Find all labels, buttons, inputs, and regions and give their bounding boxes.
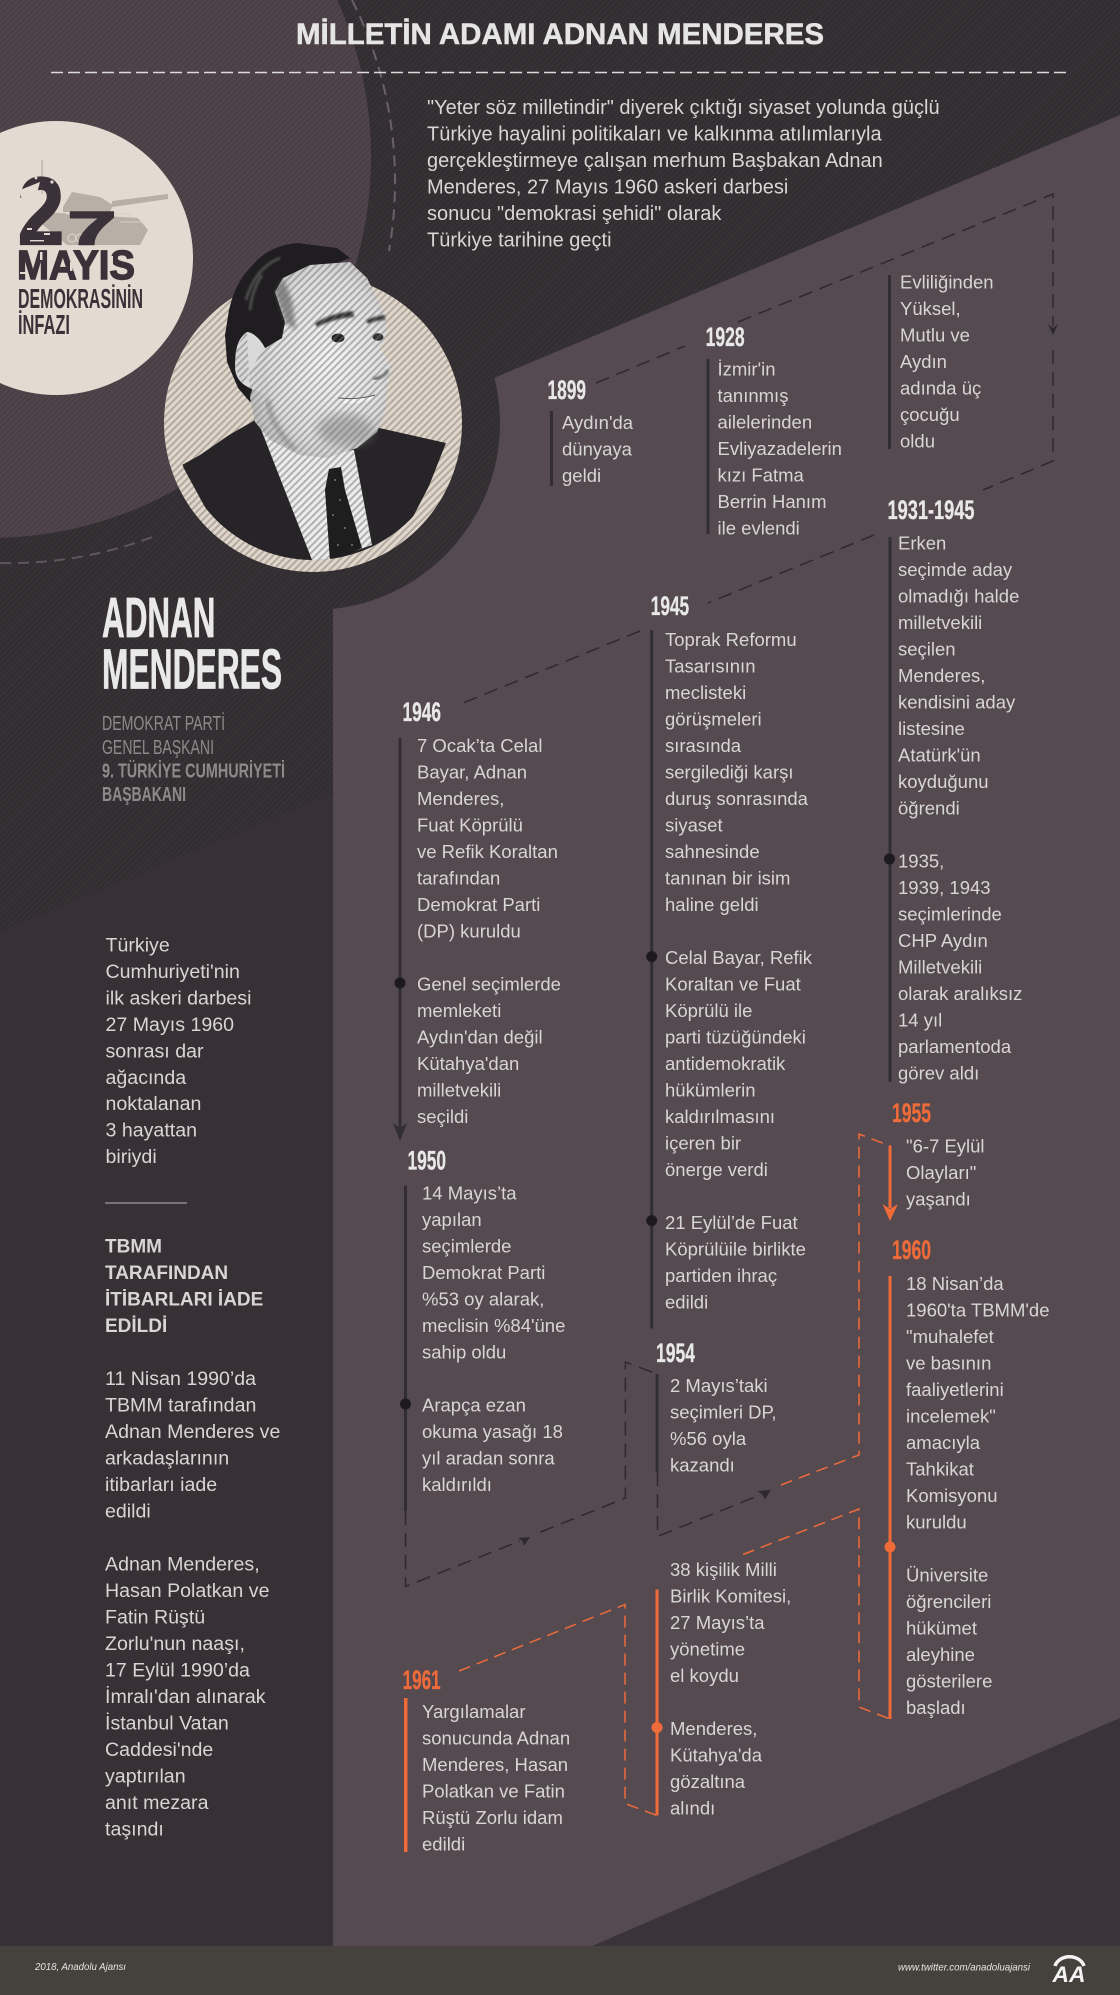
event: 1950: 14 Mayıs’ta	[422, 1182, 517, 1204]
event: 1946: ve Refik Koraltan	[417, 841, 558, 862]
event: 1960: amacıyla	[906, 1432, 981, 1453]
left text: rehabilitation: TBMM tarafından	[105, 1394, 256, 1416]
party role text: 9. TÜRKİYE CUMHURİYETİ	[102, 760, 285, 782]
event: 1928: İzmir'in	[718, 359, 776, 380]
event: 1960: ve basının	[906, 1352, 991, 1374]
arrow: down on right connector	[1048, 324, 1058, 335]
event: 1928	[706, 322, 842, 539]
event: 27 May committee	[652, 1559, 791, 1818]
event: 1961: edildi	[422, 1834, 465, 1854]
event: 1945: Köprülüile birlikte	[665, 1238, 806, 1260]
portrait: hair	[225, 243, 350, 402]
event: 1946: memleketi	[417, 1000, 501, 1021]
left text: monument: Caddesi'nde	[105, 1739, 213, 1761]
title divider	[51, 72, 1069, 74]
event: 1960	[884, 1235, 1050, 1719]
event: 1961: 1961	[403, 1665, 441, 1695]
event: 1928: 1928	[706, 322, 745, 352]
event: 1945: hükümlerin	[665, 1080, 756, 1100]
event: children: çocuğu	[900, 404, 960, 425]
event: 1945: içeren bir	[665, 1132, 741, 1154]
event: 1945: 21 Eylül’de Fuat	[665, 1212, 798, 1233]
event: 1960: 1960	[892, 1235, 931, 1265]
event: 1899: Aydın'da	[562, 412, 634, 433]
left text: coup summary: Cumhuriyeti'nin	[106, 961, 240, 983]
event: 1954: %56 oyla	[670, 1428, 747, 1449]
left text: coup summary: biriydi	[106, 1146, 157, 1168]
event: 1945: parti tüzüğündeki	[665, 1026, 806, 1048]
left text: monument: Zorlu'nun naaşı,	[105, 1633, 245, 1655]
event: 1945	[646, 591, 813, 1328]
portrait: halftone stripes	[235, 262, 392, 458]
event: 1945: duruş sonrasında	[665, 788, 809, 809]
event: 1961: Rüştü Zorlu idam	[422, 1807, 563, 1828]
event: 1931-1945: seçimde aday	[898, 559, 1013, 580]
event: 1950	[400, 1146, 565, 1511]
event: 1946: Genel seçimlerde	[417, 974, 561, 994]
badge word: MAYIS	[17, 242, 135, 288]
footer bar	[0, 1946, 1120, 1995]
party role text: DEMOKRAT PARTİ	[102, 712, 225, 735]
event: 1955	[882, 1098, 985, 1221]
title: MİLLETİN ADAMI ADNAN MENDERES	[296, 18, 824, 51]
left text: monument: taşındı	[105, 1818, 164, 1840]
portrait	[164, 243, 462, 590]
left text: monument: 17 Eylül 1990’da	[105, 1660, 250, 1682]
intro text: gerçekleştirmeye çalışan merhum Başbakan Adnan	[427, 150, 883, 172]
event: 1928: ailelerinden	[718, 412, 812, 433]
party role text	[102, 712, 285, 806]
event: 1945: Toprak Reformu	[665, 629, 797, 650]
event: 1946: (DP) kuruldu	[417, 920, 521, 942]
event: 1945: Köprülü ile	[665, 1000, 752, 1021]
event: 1945: partiden ihraç	[665, 1265, 777, 1286]
event: 1950: sahip oldu	[422, 1342, 506, 1362]
event: 1950: 1950	[408, 1146, 446, 1176]
intro text: sonucu "demokrasi şehidi" olarak	[427, 203, 722, 225]
event: 1945: kaldırılmasını	[665, 1106, 775, 1127]
event: 27 May committee: 38 kişilik Milli	[670, 1559, 777, 1580]
event: 1955: yaşandı	[906, 1188, 971, 1210]
background: dark disc behind portrait	[126, 236, 500, 610]
badge number	[18, 158, 116, 264]
event: 1946: seçildi	[417, 1106, 468, 1127]
event: 1954: 1954	[656, 1338, 695, 1368]
icon: AA logo: AA	[1051, 1962, 1086, 1987]
left text: monument: yaptırılan	[105, 1766, 186, 1788]
arrow: 1954 connector	[758, 1490, 771, 1500]
event: 1931-1945: öğrendi	[898, 798, 960, 819]
event: 1960: faaliyetlerini	[906, 1379, 1004, 1400]
footer url: www.twitter.com/anadoluajansi	[898, 1962, 1031, 1974]
event: 1945: antidemokratik	[665, 1053, 786, 1074]
event: 1928: ile evlendi	[718, 518, 800, 539]
intro text: "Yeter söz milletindir" diyerek çıktığı siyaset yolunda güçlü	[427, 97, 940, 119]
event: 1928: tanınmış	[718, 385, 788, 406]
event: 1946: Kütahya'dan	[417, 1053, 519, 1074]
event: 1928: Evliyazadelerin	[718, 438, 842, 459]
event: 1931-1945: parlamentoda	[898, 1036, 1012, 1057]
event: 1961: Yargılamalar	[422, 1701, 526, 1722]
event: 1945: haline geldi	[665, 894, 759, 915]
event: 1960: 1960'ta TBMM'de	[906, 1300, 1050, 1320]
event: children: Yüksel,	[900, 298, 961, 319]
name heading: MENDERES	[102, 638, 282, 702]
event: 1945: meclisteki	[665, 682, 746, 703]
intro text: Türkiye tarihine geçti	[427, 230, 612, 252]
arrow: 1950 connector	[518, 1537, 530, 1546]
event: 1928: kızı Fatma	[718, 465, 805, 486]
party role text: GENEL BAŞKANI	[102, 737, 214, 759]
event: children	[888, 272, 994, 452]
left text: monument: İstanbul Vatan	[105, 1712, 229, 1734]
left text: monument: Adnan Menderes,	[105, 1554, 260, 1576]
event: 27 May committee: alındı	[670, 1798, 715, 1818]
event: 1931-1945: 14 yıl	[898, 1010, 942, 1031]
left text: monument: İmralı'dan alınarak	[105, 1685, 266, 1708]
event: 1931-1945: görev aldı	[898, 1063, 979, 1084]
event: 1960: aleyhine	[906, 1644, 975, 1665]
event: 1946: milletvekili	[417, 1080, 501, 1100]
event: 1950: yapılan	[422, 1209, 482, 1230]
event: 1946: Bayar, Adnan	[417, 762, 527, 782]
event: 27 May committee: el koydu	[670, 1665, 739, 1686]
left heading: TBMM: TARAFINDAN	[105, 1263, 228, 1284]
event: 1946: 1946	[402, 697, 441, 727]
event: 1899: 1899	[548, 375, 586, 405]
event: 1961: sonucunda Adnan	[422, 1728, 570, 1748]
intro text: Türkiye hayalini politikaları ve kalkınma atılımlarıyla	[427, 124, 882, 146]
event: 1945: Celal Bayar, Refik	[665, 947, 813, 968]
event: 1945: tanınan bir isim	[665, 868, 790, 888]
left text: coup summary: noktalanan	[106, 1093, 201, 1115]
event: 1960: başladı	[906, 1697, 966, 1718]
background: dashed arc around circle	[352, 0, 395, 251]
left text: rehabilitation: 11 Nisan 1990’da	[105, 1368, 256, 1390]
event: 1950: okuma yasağı 18	[422, 1421, 563, 1442]
badge number: 7	[68, 202, 116, 254]
portrait: face	[250, 262, 392, 458]
event: children: oldu	[900, 431, 935, 452]
event: 1960: kuruldu	[906, 1512, 967, 1532]
event: 1946: tarafından	[417, 868, 500, 888]
event: 1931-1945	[884, 495, 1022, 1084]
event: 1899: dünyaya	[562, 438, 633, 460]
event: children: Mutlu ve	[900, 325, 970, 346]
event: 1945: görüşmeleri	[665, 708, 762, 730]
event: 1950: meclisin %84'üne	[422, 1315, 565, 1336]
portrait: facial features	[268, 278, 388, 450]
portrait: tie	[325, 467, 362, 562]
left text: coup summary: ağacında	[106, 1067, 186, 1089]
event: children: Aydın	[900, 351, 947, 372]
event: 1961: Polatkan ve Fatin	[422, 1780, 565, 1802]
background: main timeline panel	[333, 115, 1120, 1946]
event: 1931-1945: CHP Aydın	[898, 930, 988, 951]
event: 27 May committee: Kütahya'da	[670, 1744, 763, 1766]
event: 1946: Aydın'dan değil	[417, 1026, 543, 1048]
timeline connectors: dark dashes	[406, 194, 1058, 1586]
event: 1899: geldi	[562, 465, 601, 486]
event: 1946: 7 Ocak’ta Celal	[417, 735, 542, 756]
event: 1960: öğrencileri	[906, 1591, 991, 1612]
badge caption: DEMOKRASİNİN	[18, 283, 143, 314]
event: 27 May committee: Birlik Komitesi,	[670, 1586, 791, 1606]
left text: monument: Fatin Rüştü	[105, 1606, 205, 1628]
event: 1954: kazandı	[670, 1454, 735, 1476]
event: 1931-1945: 1931-1945	[888, 495, 974, 525]
event: children: adında üç	[900, 378, 981, 399]
badge: 27 Mayıs	[0, 121, 193, 395]
portrait: suit	[182, 420, 446, 560]
background: left column lower panel	[0, 793, 333, 1946]
event: 1946: Demokrat Parti	[417, 894, 540, 915]
left heading: TBMM: İTİBARLARI İADE	[105, 1290, 263, 1311]
event: 1954	[656, 1338, 777, 1476]
intro text: Menderes, 27 Mayıs 1960 askeri darbesi	[427, 176, 788, 198]
event: 1960: hükümet	[906, 1618, 977, 1638]
left text: coup summary: sonrası dar	[106, 1040, 204, 1062]
event: 1950: kaldırıldı	[422, 1474, 492, 1495]
event: 1945: sergilediği karşı	[665, 762, 794, 782]
event: 1950: seçimlerde	[422, 1236, 511, 1256]
event: 27 May committee: yönetime	[670, 1638, 745, 1660]
event: 1928: Berrin Hanım	[718, 491, 826, 512]
event: 27 May committee: Menderes,	[670, 1718, 757, 1739]
event: 1945: sahnesinde	[665, 841, 760, 862]
event: 1945: edildi	[665, 1292, 708, 1312]
footer credit: 2018, Anadolu Ajansı	[34, 1961, 126, 1973]
background: lower dashed arc	[0, 536, 155, 563]
event: 1954: seçimleri DP,	[670, 1402, 777, 1422]
event: 1945: 1945	[651, 591, 689, 621]
event: 1931-1945: milletvekili	[898, 612, 982, 633]
left text: monument: Hasan Polatkan ve	[105, 1580, 270, 1602]
event: 1961	[403, 1665, 570, 1854]
event: 1931-1945: olarak aralıksız	[898, 983, 1022, 1004]
left text: coup summary: 3 hayattan	[106, 1120, 197, 1142]
portrait: shirt	[260, 428, 372, 560]
event: 1954: 2 Mayıs’taki	[670, 1375, 768, 1396]
event: 1950: %53 oy alarak,	[422, 1288, 544, 1310]
left text: coup summary: ilk askeri darbesi	[106, 987, 251, 1009]
badge number: 2	[18, 158, 64, 264]
left text: rehabilitation: itibarları iade	[105, 1474, 217, 1496]
event: 1960: incelemek"	[906, 1406, 996, 1426]
left heading: TBMM: EDİLDİ	[105, 1316, 167, 1337]
event: 1946: Fuat Köprülü	[417, 814, 523, 836]
event: 1945: önerge verdi	[665, 1159, 768, 1180]
event: 1945: Koraltan ve Fuat	[665, 974, 801, 994]
event: 1946	[393, 697, 561, 1141]
event: 1955: 1955	[892, 1098, 931, 1128]
background: large lighter circle	[0, 0, 371, 538]
event: 1931-1945: listesine	[898, 718, 965, 739]
event: 1931-1945: koyduğunu	[898, 771, 989, 792]
event: 1960: gösterilere	[906, 1670, 992, 1692]
event: children: Evliliğinden	[900, 272, 994, 293]
event: 1931-1945: seçimlerinde	[898, 904, 1002, 925]
event: 1931-1945: Atatürk'ün	[898, 745, 981, 766]
event: 1945: sırasında	[665, 735, 742, 756]
event: 1931-1945: 1939, 1943	[898, 877, 991, 898]
event: 1946: Menderes,	[417, 788, 504, 809]
event: 1960: Tahkikat	[906, 1458, 974, 1480]
badge caption	[18, 283, 143, 340]
left text: coup summary: 27 Mayıs 1960	[106, 1014, 234, 1036]
event: 1931-1945: olmadığı halde	[898, 586, 1019, 607]
event: 1931-1945: Milletvekili	[898, 957, 982, 978]
event: 1899	[548, 375, 634, 486]
event: 1950: Arapça ezan	[422, 1394, 526, 1416]
event: 1960: Komisyonu	[906, 1485, 998, 1506]
left text: monument: anıt mezara	[105, 1792, 209, 1814]
event: 27 May committee: 27 Mayıs’ta	[670, 1612, 765, 1633]
party role text: BAŞBAKANI	[102, 784, 186, 806]
left text: coup summary: Türkiye	[106, 934, 170, 956]
event: 1931-1945: seçilen	[898, 639, 956, 660]
event: 1945: Tasarısının	[665, 656, 756, 676]
event: 1961: Menderes, Hasan	[422, 1754, 568, 1775]
left text: rehabilitation: arkadaşlarının	[105, 1448, 229, 1470]
left divider	[105, 1202, 187, 1204]
left heading: TBMM: TBMM	[105, 1237, 162, 1258]
event: 1960: Üniversite	[906, 1564, 988, 1586]
portrait: ear	[235, 332, 268, 393]
event: 1931-1945: kendisini aday	[898, 692, 1016, 713]
portrait: hair shading	[246, 258, 280, 310]
event: 1960: "muhalefet	[906, 1326, 994, 1347]
event: 1931-1945: Menderes,	[898, 665, 985, 686]
event: 1950: yıl aradan sonra	[422, 1448, 555, 1468]
event: 1931-1945: Erken	[898, 533, 946, 554]
icon: tank	[42, 160, 168, 245]
event: 27 May committee: gözaltına	[670, 1771, 746, 1792]
name heading: ADNAN	[102, 586, 216, 650]
timeline connectors: orange dashes	[459, 1134, 891, 1816]
badge caption: İNFAZI	[18, 309, 70, 340]
name heading	[102, 586, 282, 702]
left text: rehabilitation: Adnan Menderes ve	[105, 1421, 280, 1443]
event: 1955: "6-7 Eylül	[906, 1136, 985, 1156]
background: bottom right dark wedge	[592, 1718, 1120, 1946]
event: 1945: siyaset	[665, 814, 723, 836]
event: 1955: Olayları"	[906, 1162, 976, 1183]
event: 1950: Demokrat Parti	[422, 1262, 545, 1283]
left text: rehabilitation: edildi	[105, 1500, 151, 1522]
event: 1931-1945: 1935,	[898, 851, 944, 872]
event: 1960: 18 Nisan’da	[906, 1273, 1004, 1294]
